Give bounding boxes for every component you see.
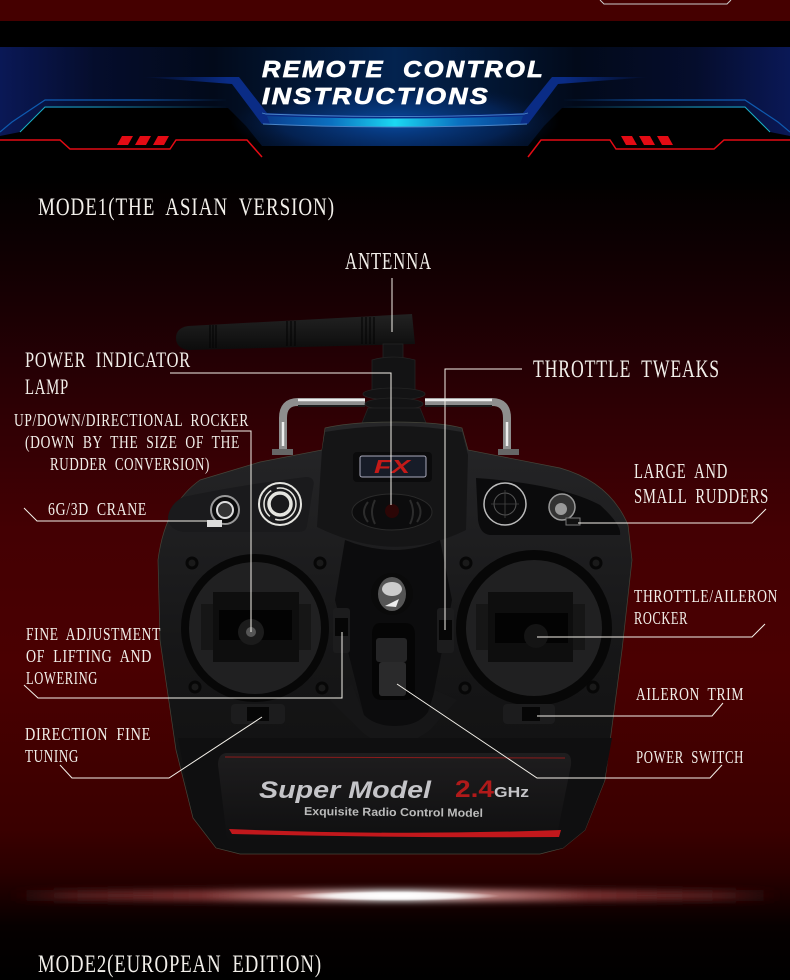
label: 6G/3D crane: 6G/3D CRANE: [48, 499, 147, 519]
top maroon strip: [0, 0, 790, 21]
right dial: [484, 483, 526, 525]
header title: [262, 56, 545, 109]
toggle left: [207, 496, 239, 527]
label: up/down/directional rocker: [14, 410, 249, 475]
heading: mode 1: MODE1(THE ASIAN VERSION): [38, 194, 335, 221]
label: fine adjustment: OF LIFTING AND: [26, 646, 152, 666]
label: throttle/aileron rocker: [634, 586, 778, 628]
left switch panel: [168, 477, 314, 532]
header banner: [0, 47, 790, 164]
transmitter body: [158, 422, 632, 854]
label: throttle tweaks: THROTTLE TWEAKS: [533, 356, 720, 383]
FX badge: FX: [374, 457, 412, 477]
label: large and small rudders: [634, 459, 769, 508]
callout lines: [24, 278, 766, 778]
label: fine adjustment: [26, 624, 161, 688]
handle: [272, 400, 519, 452]
red ticks right: [621, 136, 673, 145]
left gimbal: [181, 554, 329, 702]
label: fine adjustment: LOWERING: [26, 668, 98, 688]
label: power switch: POWER SWITCH: [636, 747, 744, 767]
FX badge: [353, 452, 432, 482]
center console: [317, 426, 468, 547]
center spine: [335, 540, 452, 726]
trim sliders: [231, 608, 555, 724]
remote control illustration: [158, 314, 632, 854]
brand plate: 2.4: [455, 776, 495, 803]
label: direction fine tuning: TUNING: [25, 746, 79, 766]
brand plate: GHz: [494, 784, 529, 801]
label: antenna: ANTENNA: [345, 249, 432, 275]
label: direction fine tuning: DIRECTION FINE: [25, 724, 151, 744]
label: power indicator lamp: LAMP: [25, 374, 69, 399]
label: aileron trim: AILERON TRIM: [636, 684, 744, 704]
right gimbal: [456, 550, 612, 706]
right switch panel: [476, 478, 620, 535]
corner screws: [187, 558, 601, 693]
label: fine adjustment: FINE ADJUSTMENT: [26, 624, 161, 644]
label: throttle/aileron rocker: ROCKER: [634, 608, 688, 628]
brand plate: Exquisite Radio Control Model: [304, 806, 483, 820]
red header linework: [0, 136, 790, 157]
U channel around power switch: [330, 684, 457, 744]
label: power indicator lamp: [25, 347, 191, 399]
brand plate: [218, 753, 571, 842]
label: up/down/directional rocker: RUDDER CONVERSION): [50, 454, 210, 475]
label: up/down/directional rocker: UP/DOWN/DIRECTIONAL ROCKER: [14, 410, 249, 430]
label: power indicator lamp: POWER INDICATOR: [25, 347, 191, 372]
header title: INSTRUCTIONS: [262, 83, 490, 109]
heading: mode 2: MODE2(EUROPEAN EDITION): [38, 951, 322, 978]
left dial: [259, 483, 301, 525]
header title: REMOTE CONTROL: [262, 56, 545, 82]
antenna mount neck: [360, 344, 428, 428]
icon: antenna: [176, 314, 415, 350]
red ticks left: [117, 136, 169, 145]
lower frame: [178, 738, 612, 853]
label: up/down/directional rocker: (DOWN BY THE SIZE OF THE: [25, 432, 240, 453]
speaker indicator: [352, 494, 432, 530]
label: large and small rudders: LARGE AND: [634, 459, 728, 483]
brand plate: Super Model: [259, 777, 433, 804]
chrome center knob: [371, 573, 413, 615]
glow divider: [8, 890, 782, 901]
toggle right: [549, 494, 580, 525]
power switch: [372, 623, 415, 700]
label: direction fine tuning: [25, 724, 151, 766]
